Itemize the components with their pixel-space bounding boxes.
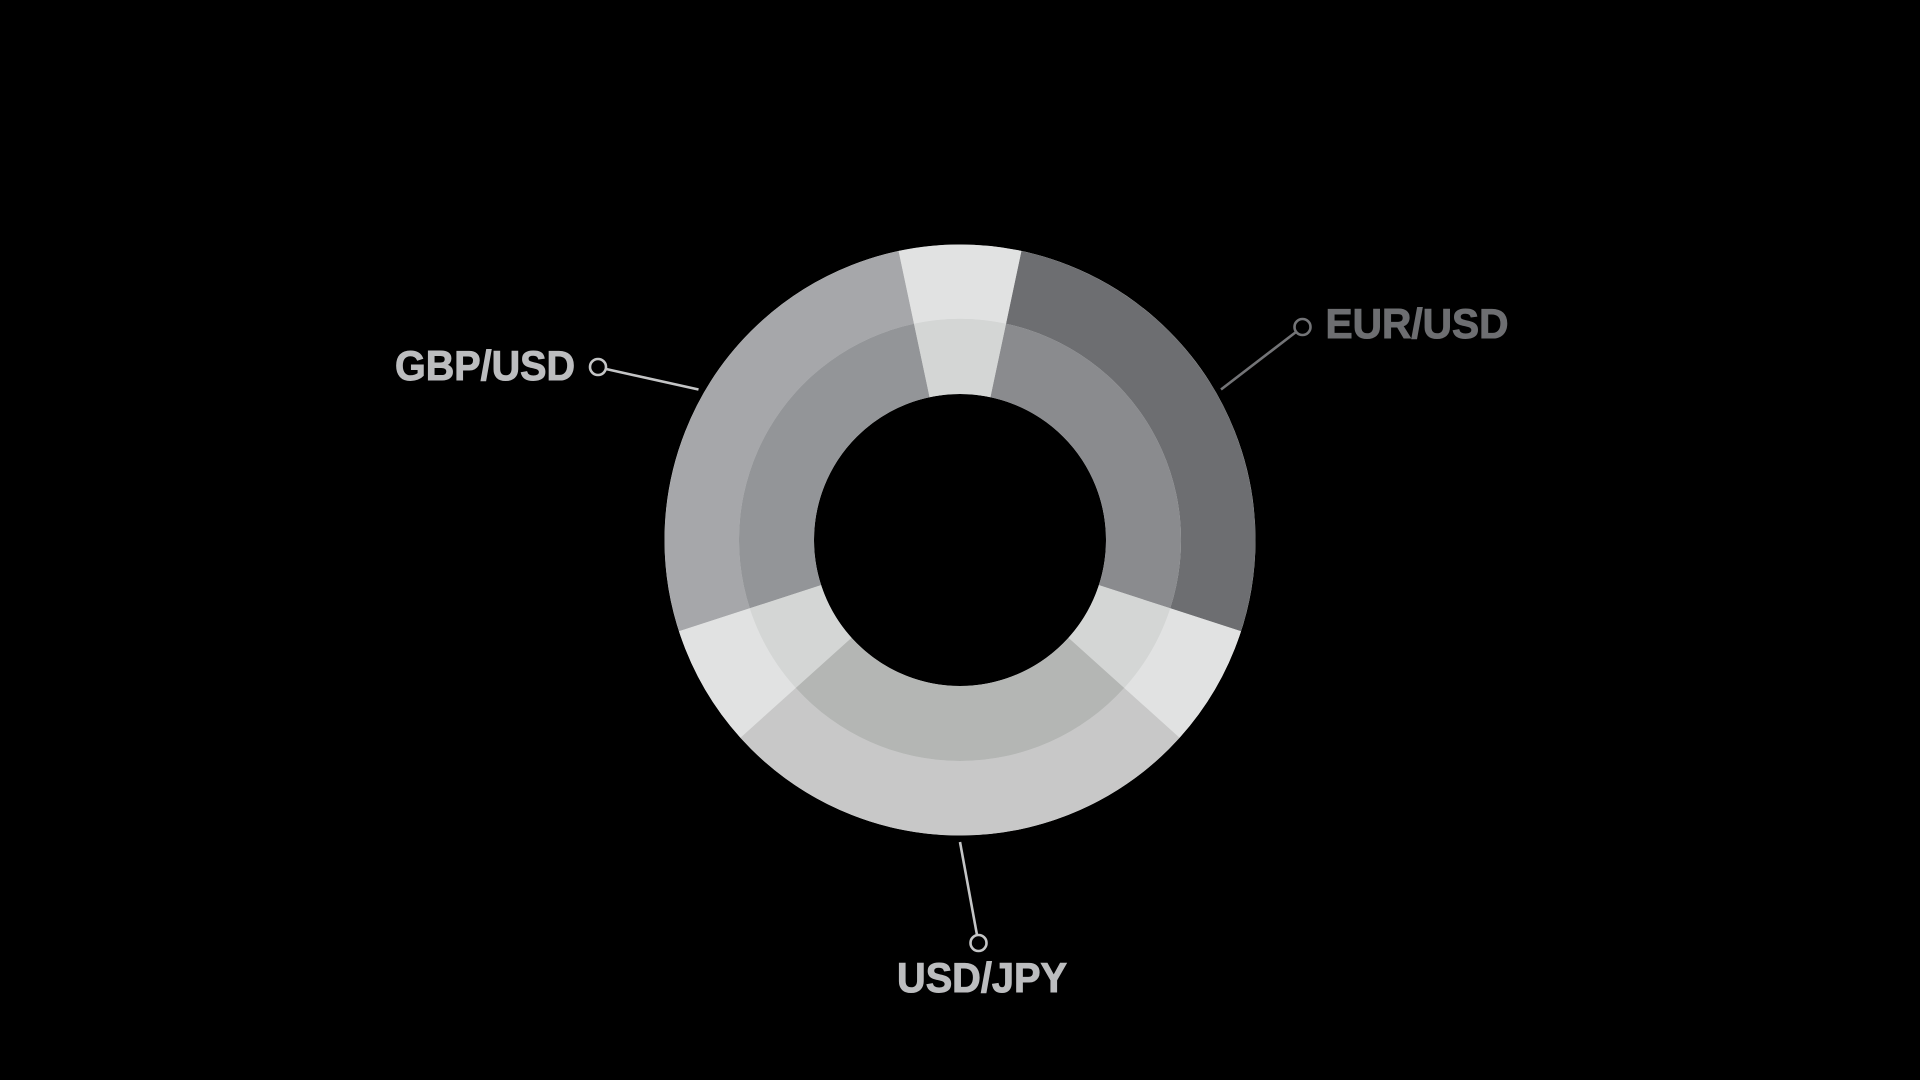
segment: EUR/USD <box>990 251 1255 631</box>
label: GBP/USD: GBP/USD <box>395 342 575 389</box>
label: USD/JPY: USD/JPY <box>897 954 1067 1001</box>
segment: USD/JPY <box>740 638 1180 835</box>
segment: GBP/USD <box>665 251 930 631</box>
callout: GBP/USD <box>395 342 698 390</box>
segment: lower left separator wedge <box>679 585 852 738</box>
donut chart <box>665 245 1255 835</box>
leader: USD/JPY <box>960 842 986 951</box>
leader: EUR/USD <box>1221 319 1310 390</box>
callout: EUR/USD <box>1221 300 1508 390</box>
segment: lower right separator wedge <box>1068 585 1241 738</box>
leader: GBP/USD <box>590 359 698 390</box>
label: EUR/USD: EUR/USD <box>1326 300 1508 347</box>
segment: top separator wedge <box>899 245 1021 397</box>
callout: USD/JPY <box>897 842 1067 1001</box>
